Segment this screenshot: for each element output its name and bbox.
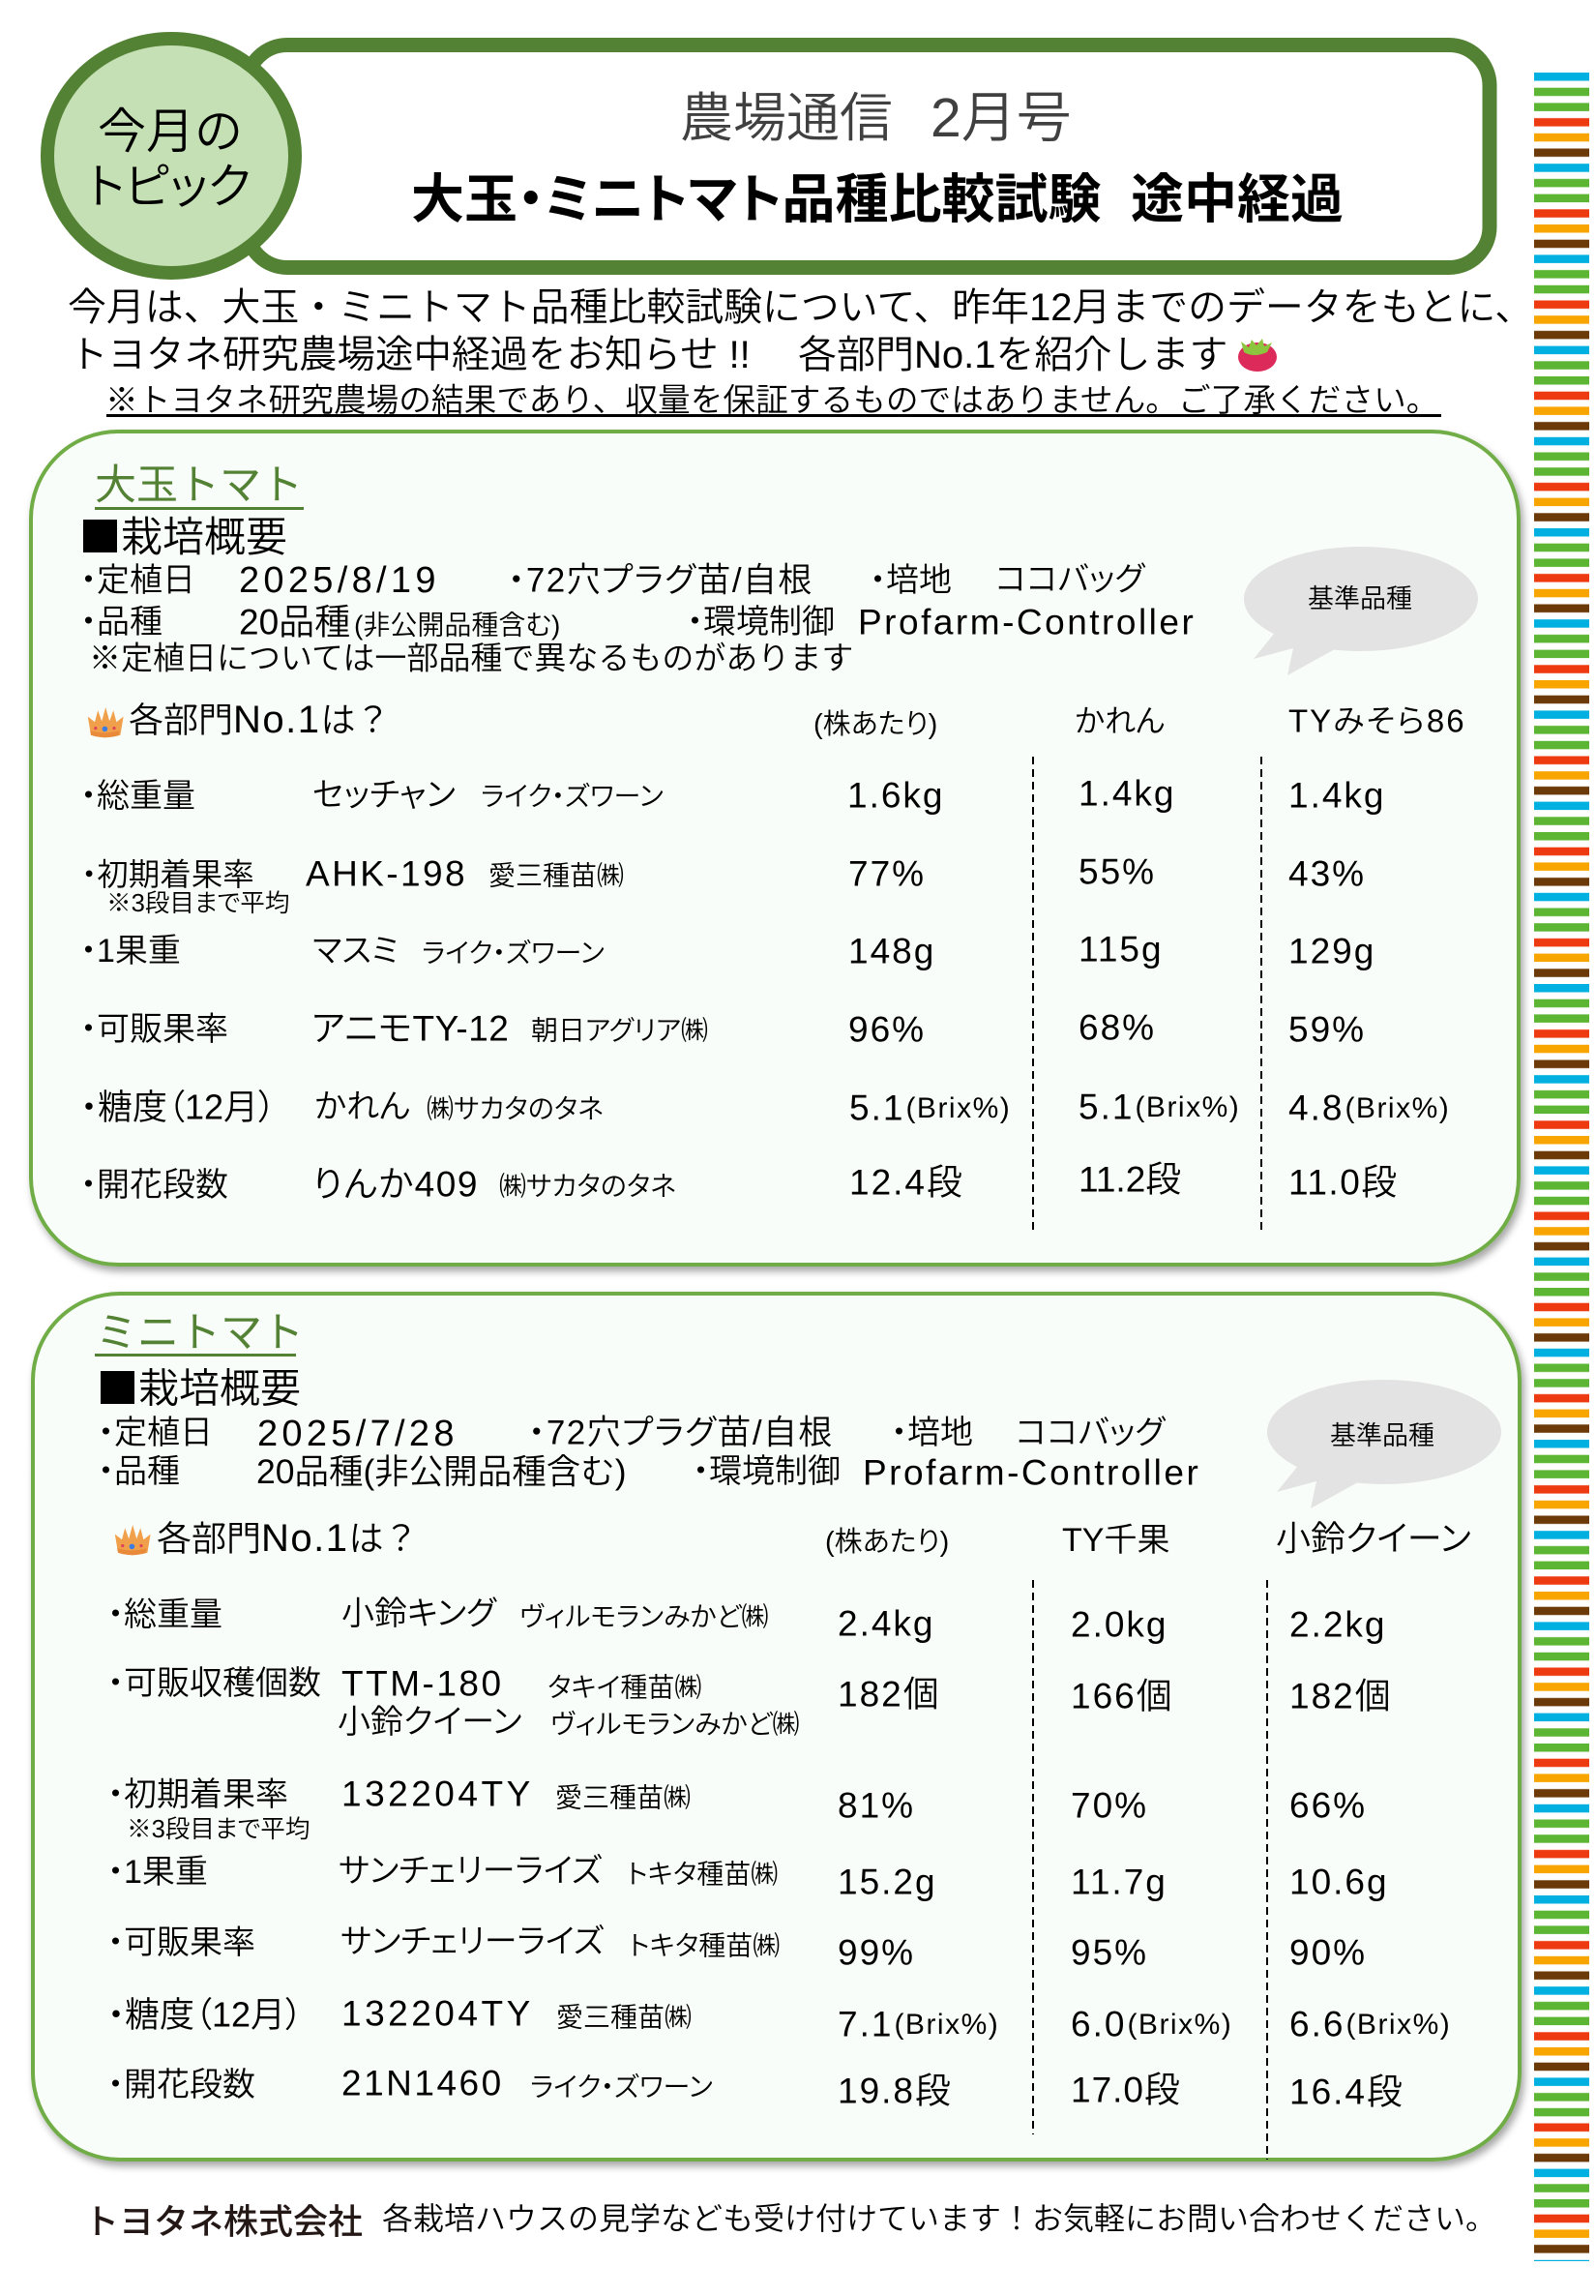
row: fruit weight: ・1果重 <box>80 933 181 969</box>
column head: karen: かれん <box>1075 703 1165 738</box>
row: fruit weight: ・1果重 <box>107 1854 208 1891</box>
cultivation details: ココバッグ <box>995 561 1146 598</box>
row: fruit weight: 115g <box>1079 929 1164 969</box>
row: initial fruit set: 愛三種苗㈱ <box>555 1782 691 1813</box>
row: initial fruit set: ・初期着果率 <box>81 857 254 892</box>
heading: No.1: 各部門No.1は？ <box>129 699 391 741</box>
cultivation details <box>80 560 1196 675</box>
row: marketable rate: トキタ種苗㈱ <box>629 1931 780 1960</box>
row: flowering stages: 19.8段 <box>838 2071 953 2111</box>
row: marketable count: 小鈴クイーン <box>338 1704 521 1741</box>
panel: mini tomato <box>33 1294 1520 2160</box>
disclaimer: ※トヨタネ研究農場の結果であり、収量を保証するものではありません。ご了承ください。 <box>105 382 1439 419</box>
column head: kosuzu queen: 小鈴クイーン <box>1276 1519 1471 1558</box>
row: marketable rate: ・可販果率 <box>107 1924 255 1961</box>
row: sugar content: かれん <box>314 1088 410 1125</box>
cultivation details: ココバッグ <box>1016 1415 1167 1451</box>
row: sugar content: 6.0(Brix%) <box>1071 2005 1232 2043</box>
row: total weight: ・総重量 <box>80 778 195 815</box>
row: initial fruit set: 77% <box>848 853 926 894</box>
row: flowering stages: ・開花段数 <box>80 1167 228 1204</box>
row: flowering stages: ㈱サカタのタネ <box>499 1171 676 1202</box>
cultivation details: ・培地 <box>870 562 952 599</box>
row: marketable rate: アニモTY-12 <box>311 1008 509 1049</box>
cultivation details: ・品種 <box>80 604 163 641</box>
row: sugar content: ・糖度（12月） <box>80 1088 276 1126</box>
row: flowering stages: 11.0段 <box>1288 1163 1399 1202</box>
cultivation details <box>98 1414 1200 1492</box>
callout: standard varieties: 基準品種 <box>1308 584 1412 613</box>
row: initial fruit set: 132204TY <box>341 1774 534 1813</box>
row: marketable count: ヴィルモランみかど㈱ <box>550 1709 800 1740</box>
row: sugar content <box>80 1088 1450 1128</box>
row: initial fruit set: ・初期着果率 <box>107 1776 288 1813</box>
row: marketable count: TTM-180 <box>341 1664 504 1703</box>
intro text: 各部門No.1を紹介します <box>798 334 1228 376</box>
row: total weight: 1.6kg <box>847 776 945 815</box>
cultivation details: ・定植日 <box>98 1415 213 1451</box>
row: marketable rate: 96% <box>848 1010 926 1049</box>
row: fruit weight: 11.7g <box>1071 1862 1167 1902</box>
cultivation details: 2025/7/28 <box>257 1414 458 1454</box>
cultivation details: ・環境制御 <box>693 1453 841 1490</box>
row: sugar content: 7.1(Brix%) <box>838 2005 999 2043</box>
icon: crown <box>88 707 124 737</box>
row: fruit weight: 129g <box>1288 931 1375 971</box>
row: total weight <box>80 774 1386 815</box>
row: marketable count: ・可販収穫個数 <box>107 1665 321 1702</box>
header frame <box>247 45 1490 267</box>
row: initial fruit set: ※3段目まで平均 <box>106 889 289 917</box>
cultivation details: (非公開品種含む) <box>354 610 560 641</box>
title: main: 大玉・ミニトマト品種比較試験 途中経過 <box>411 169 1344 229</box>
row: sugar content: 132204TY <box>341 1993 534 2034</box>
row: total weight: ヴィルモランみかど㈱ <box>519 1602 769 1631</box>
row: marketable count: タキイ種苗㈱ <box>547 1672 701 1703</box>
row: flowering stages <box>80 1159 1399 1204</box>
footer message: 各栽培ハウスの見学なども受け付けています！お気軽にお問い合わせください。 <box>382 2201 1496 2236</box>
row: flowering stages: 12.4段 <box>849 1163 964 1202</box>
cultivation details: 20品種 <box>239 602 350 642</box>
row: fruit weight: ライク・ズワーン <box>422 939 605 968</box>
row: total weight: 1.4kg <box>1288 776 1386 815</box>
row: initial fruit set: 81% <box>838 1786 915 1825</box>
callout: standard varieties: 基準品種 <box>1330 1421 1434 1450</box>
row: fruit weight: サンチェリーライズ <box>339 1853 603 1890</box>
intro text <box>68 286 1533 376</box>
cultivation details: Profarm-Controller <box>858 602 1196 642</box>
column head: TY misora: TYみそら86 <box>1288 702 1466 739</box>
row: flowering stages: 11.2段 <box>1079 1159 1181 1200</box>
topic circle badge <box>47 39 295 273</box>
panel: large tomato <box>31 432 1519 1265</box>
intro text: 今月は、大玉・ミニトマト品種比較試験について、昨年12月までのデータをもとに、 <box>68 286 1533 329</box>
callout: standard varieties <box>1244 547 1478 675</box>
row: total weight: ライク・ズワーン <box>481 782 664 811</box>
row: sugar content: 4.8(Brix%) <box>1288 1088 1450 1128</box>
row: flowering stages: ライク・ズワーン <box>530 2072 713 2102</box>
row: marketable rate: サンチェリーライズ <box>340 1923 605 1960</box>
row: sugar content <box>107 1993 1451 2043</box>
cultivation details: ・72穴プラグ苗/自根 <box>508 561 813 600</box>
row: flowering stages <box>107 2063 1404 2111</box>
row: fruit weight <box>80 929 1375 971</box>
row: fruit weight: 10.6g <box>1289 1862 1389 1902</box>
heading: 大玉トマト <box>95 462 303 509</box>
cultivation details: 20品種(非公開品種含む) <box>256 1452 627 1491</box>
cultivation details: ・培地 <box>891 1415 973 1451</box>
row: marketable rate: 99% <box>838 1933 915 1972</box>
row: marketable rate: 59% <box>1288 1010 1366 1049</box>
cultivation overview heading: 栽培概要 <box>121 515 287 561</box>
callout: standard varieties <box>1267 1380 1501 1508</box>
row: initial fruit set <box>107 1774 1367 1843</box>
row: marketable count: 166個 <box>1071 1676 1174 1716</box>
row: marketable count <box>107 1664 1393 1741</box>
per plant note: (株あたり) <box>813 708 937 740</box>
row: initial fruit set: 70% <box>1071 1786 1148 1825</box>
row: flowering stages: 16.4段 <box>1289 2072 1404 2111</box>
cultivation details: ※定植日については一部品種で異なるものがあります <box>89 641 853 675</box>
per plant note: (株あたり) <box>825 1526 949 1558</box>
icon: crown <box>115 1525 151 1555</box>
row: marketable rate: 95% <box>1071 1933 1148 1972</box>
row: total weight: 1.4kg <box>1079 774 1176 813</box>
row: flowering stages: 21N1460 <box>341 2063 504 2103</box>
cultivation overview heading: 栽培概要 <box>138 1366 301 1411</box>
company logo text: トヨタネ株式会社 <box>84 2202 363 2241</box>
row: marketable rate: 90% <box>1289 1933 1367 1972</box>
row: total weight: 2.0kg <box>1071 1604 1168 1645</box>
topic circle badge: トピック <box>87 160 251 214</box>
title: issue <box>680 87 1072 149</box>
row: sugar content: ㈱サカタのタネ <box>427 1093 604 1124</box>
row: fruit weight: 15.2g <box>838 1862 937 1902</box>
row: total weight: 2.2kg <box>1289 1604 1387 1645</box>
cultivation details: Profarm-Controller <box>863 1453 1200 1492</box>
row: flowering stages: 17.0段 <box>1071 2071 1181 2109</box>
row: marketable rate <box>107 1923 1367 1972</box>
title: issue: 農場通信 <box>680 88 893 148</box>
heading: No.1: 各部門No.1は？ <box>157 1517 419 1560</box>
title: issue: 2月号 <box>931 87 1072 149</box>
row: marketable count: 182個 <box>1289 1676 1393 1716</box>
cultivation details: ・環境制御 <box>687 604 835 641</box>
topic circle badge: 今月の <box>98 104 243 159</box>
row: total weight: 2.4kg <box>838 1604 935 1643</box>
row: fruit weight: 148g <box>848 931 935 971</box>
column head: TY chika: TY千果 <box>1062 1522 1169 1559</box>
row: total weight <box>107 1595 1387 1645</box>
column dividers <box>1033 1580 1267 2160</box>
row: marketable rate <box>80 1008 1366 1049</box>
row: total weight: 小鈴キング <box>341 1595 497 1632</box>
row: marketable rate: ・可販果率 <box>80 1011 228 1048</box>
row: flowering stages: ・開花段数 <box>107 2067 255 2103</box>
row: total weight: セッチャン <box>312 777 456 814</box>
cultivation details: ・品種 <box>98 1453 180 1490</box>
row: initial fruit set: 43% <box>1288 853 1366 894</box>
row: initial fruit set: AHK-198 <box>306 853 467 894</box>
heading: ミニトマト <box>96 1310 304 1357</box>
row: marketable count: 182個 <box>838 1674 941 1715</box>
row: fruit weight <box>107 1853 1389 1902</box>
row: sugar content: 愛三種苗㈱ <box>556 2003 692 2032</box>
row: fruit weight: トキタ種苗㈱ <box>627 1860 778 1889</box>
row: flowering stages: りんか409 <box>312 1165 479 1204</box>
column dividers <box>1033 757 1261 1235</box>
row: total weight: ・総重量 <box>107 1596 222 1633</box>
row: initial fruit set <box>81 851 1366 917</box>
cultivation details: ・72穴プラグ苗/自根 <box>528 1415 834 1451</box>
row: sugar content: 6.6(Brix%) <box>1289 2005 1451 2043</box>
row: initial fruit set: 愛三種苗㈱ <box>488 861 624 890</box>
cultivation details: ・定植日 <box>80 562 195 599</box>
row: fruit weight: マスミ <box>312 933 399 969</box>
row: initial fruit set: 66% <box>1289 1786 1367 1825</box>
intro text: トヨタネ研究農場途中経過をお知らせ !! <box>70 334 751 376</box>
cultivation details: 2025/8/19 <box>239 560 440 601</box>
row: sugar content: ・糖度（12月） <box>107 1995 303 2034</box>
row: initial fruit set: 55% <box>1079 851 1156 892</box>
row: initial fruit set: ※3段目まで平均 <box>127 1815 310 1843</box>
row: sugar content: 5.1(Brix%) <box>1079 1088 1240 1126</box>
row: marketable rate: 朝日アグリア㈱ <box>531 1016 708 1045</box>
decorative colour stripes <box>1534 73 1589 2261</box>
row: marketable rate: 68% <box>1079 1008 1156 1047</box>
icon: tomato <box>1238 339 1277 372</box>
row: sugar content: 5.1(Brix%) <box>849 1088 1011 1128</box>
